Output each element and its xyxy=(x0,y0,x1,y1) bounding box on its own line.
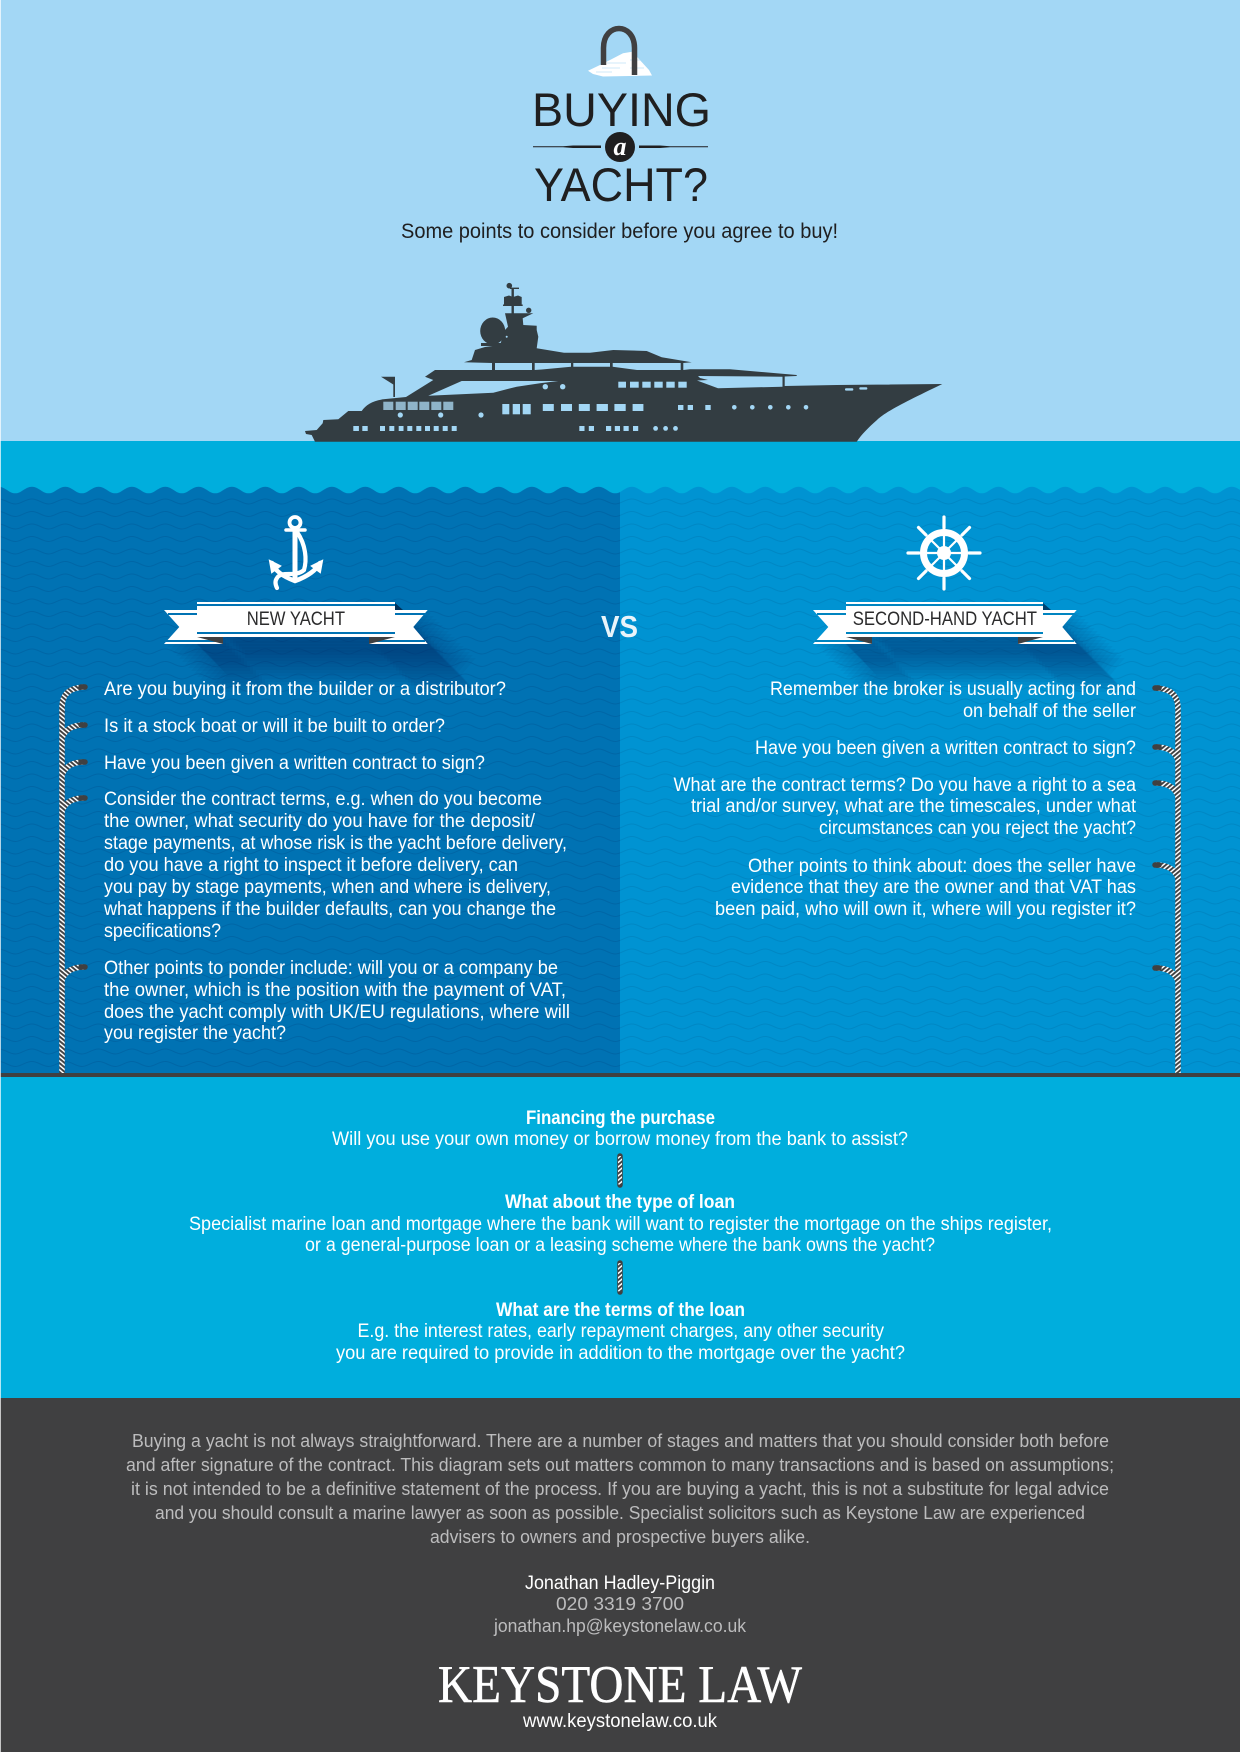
icon: anchor xyxy=(270,517,322,588)
ribbon: new yacht xyxy=(164,602,476,692)
title: YACHT? xyxy=(534,158,708,211)
rope connector 1 xyxy=(617,1156,623,1185)
subtitle: Some points to consider before you agree to buy! xyxy=(401,220,838,243)
text: disclaimer: and after signature of the contract. This diagram sets out matters common to many transactions and is based on assumptions; xyxy=(126,1454,1114,1475)
text: new yacht points: stage payments, at whose risk is the yacht before delivery, xyxy=(104,833,567,854)
rope connector 2 xyxy=(617,1263,623,1292)
text: terms of the loan: E.g. the interest rates, early repayment charges, any other security xyxy=(358,1321,884,1342)
text: contact details: jonathan.hp@keystonelaw.co.uk xyxy=(493,1615,747,1636)
text: new yacht points: the owner, what security do you have for the deposit/ xyxy=(104,811,536,832)
text: second-hand yacht points: trial and/or survey, what are the timescales, under what xyxy=(691,796,1137,817)
text: second-hand yacht points: circumstances can you reject the yacht? xyxy=(819,818,1136,839)
text: type of loan: What about the type of loan xyxy=(505,1192,735,1213)
background: sea xyxy=(0,441,1240,491)
yacht silhouette xyxy=(305,283,942,442)
text: terms of the loan xyxy=(336,1300,905,1364)
title: BUYING xyxy=(532,83,711,136)
text: contact details: 020 3319 3700 xyxy=(556,1593,684,1614)
text: new yacht points: Are you buying it from the builder or a distributor? xyxy=(104,679,506,700)
text: new yacht points: specifications? xyxy=(104,921,221,942)
text: second-hand yacht points xyxy=(674,679,1137,920)
text: second-hand yacht points: What are the contract terms? Do you have a right to a sea xyxy=(674,775,1136,796)
text: type of loan xyxy=(189,1192,1052,1256)
text: new yacht points xyxy=(103,679,570,1044)
text: financing the purchase xyxy=(332,1108,908,1150)
title xyxy=(532,83,711,211)
text: financing the purchase: Financing the purchase xyxy=(526,1108,715,1129)
ribbon label: second-hand yacht: SECOND-HAND YACHT xyxy=(853,609,1037,630)
text: disclaimer: advisers to owners and prospective buyers alike. xyxy=(430,1526,810,1547)
text: terms of the loan: What are the terms of the loan xyxy=(496,1300,745,1321)
text: new yacht points: do you have a right to inspect it before delivery, can xyxy=(104,855,518,876)
text: new yacht points: Is it a stock boat or will it be built to order? xyxy=(104,716,445,737)
text: second-hand yacht points: evidence that they are the owner and that VAT has xyxy=(731,877,1136,898)
panel background: new yacht xyxy=(0,486,620,1073)
text: new yacht points: does the yacht comply with UK/EU regulations, where will xyxy=(104,1002,570,1023)
text: contact details: Jonathan Hadley-Piggin xyxy=(525,1573,715,1594)
logo icon: arch and small yacht xyxy=(588,28,652,76)
text: new yacht points: Other points to ponder include: will you or a company be xyxy=(104,958,558,979)
icon: ship wheel xyxy=(908,517,980,589)
text: disclaimer xyxy=(126,1430,1114,1547)
website: www.keystonelaw.co.uk xyxy=(522,1711,717,1732)
text: contact details xyxy=(493,1573,747,1636)
text: financing the purchase: Will you use your own money or borrow money from the bank to assist? xyxy=(332,1129,908,1150)
text: new yacht points: you register the yacht? xyxy=(104,1023,286,1044)
logo: keystone law: KEYSTONE LAW xyxy=(438,1656,802,1714)
text: new yacht points: the owner, which is the position with the payment of VAT, xyxy=(104,980,566,1001)
text: second-hand yacht points: on behalf of the seller xyxy=(963,701,1137,722)
text: new yacht points: what happens if the builder defaults, can you change the xyxy=(103,899,556,920)
panel: footer xyxy=(0,1398,1240,1752)
title: a xyxy=(614,132,626,161)
rope: right list xyxy=(1155,688,1178,1073)
text: disclaimer: it is not intended to be a definitive statement of the process. If you are buying a yacht, this is not a substitute for legal advice xyxy=(131,1478,1109,1499)
ribbon: second-hand yacht xyxy=(813,602,1125,692)
text: second-hand yacht points: Remember the broker is usually acting for and xyxy=(770,679,1136,700)
text: disclaimer: and you should consult a marine lawyer as soon as possible. Specialist solicitors such as Keystone Law are experienced xyxy=(155,1502,1085,1523)
panel: financing xyxy=(0,1077,1240,1398)
text: terms of the loan: you are required to provide in addition to the mortgage over the yacht? xyxy=(336,1343,905,1364)
divider bar xyxy=(0,1073,1240,1077)
text: type of loan: or a general-purpose loan or a leasing scheme where the bank owns the yacht? xyxy=(305,1235,935,1256)
ribbon label: new yacht: NEW YACHT xyxy=(247,609,345,630)
text: new yacht points: Have you been given a written contract to sign? xyxy=(104,753,485,774)
text: new yacht points: Consider the contract terms, e.g. when do you become xyxy=(104,789,542,810)
background: sky xyxy=(0,0,1240,441)
vs label: VS xyxy=(601,609,638,644)
rope: left list xyxy=(62,687,85,1073)
text: type of loan: Specialist marine loan and mortgage where the bank will want to register the mortgage on the ships register, xyxy=(189,1214,1052,1235)
panel background: second-hand yacht xyxy=(620,486,1240,1073)
text: second-hand yacht points: Other points to think about: does the seller have xyxy=(748,856,1136,877)
text: disclaimer: Buying a yacht is not always straightforward. There are a number of stages and matters that you should consider both before xyxy=(132,1430,1109,1451)
text: new yacht points: you pay by stage payments, when and where is delivery, xyxy=(104,877,551,898)
text: second-hand yacht points: been paid, who will own it, where will you register it? xyxy=(715,899,1136,920)
text: second-hand yacht points: Have you been given a written contract to sign? xyxy=(755,738,1136,759)
